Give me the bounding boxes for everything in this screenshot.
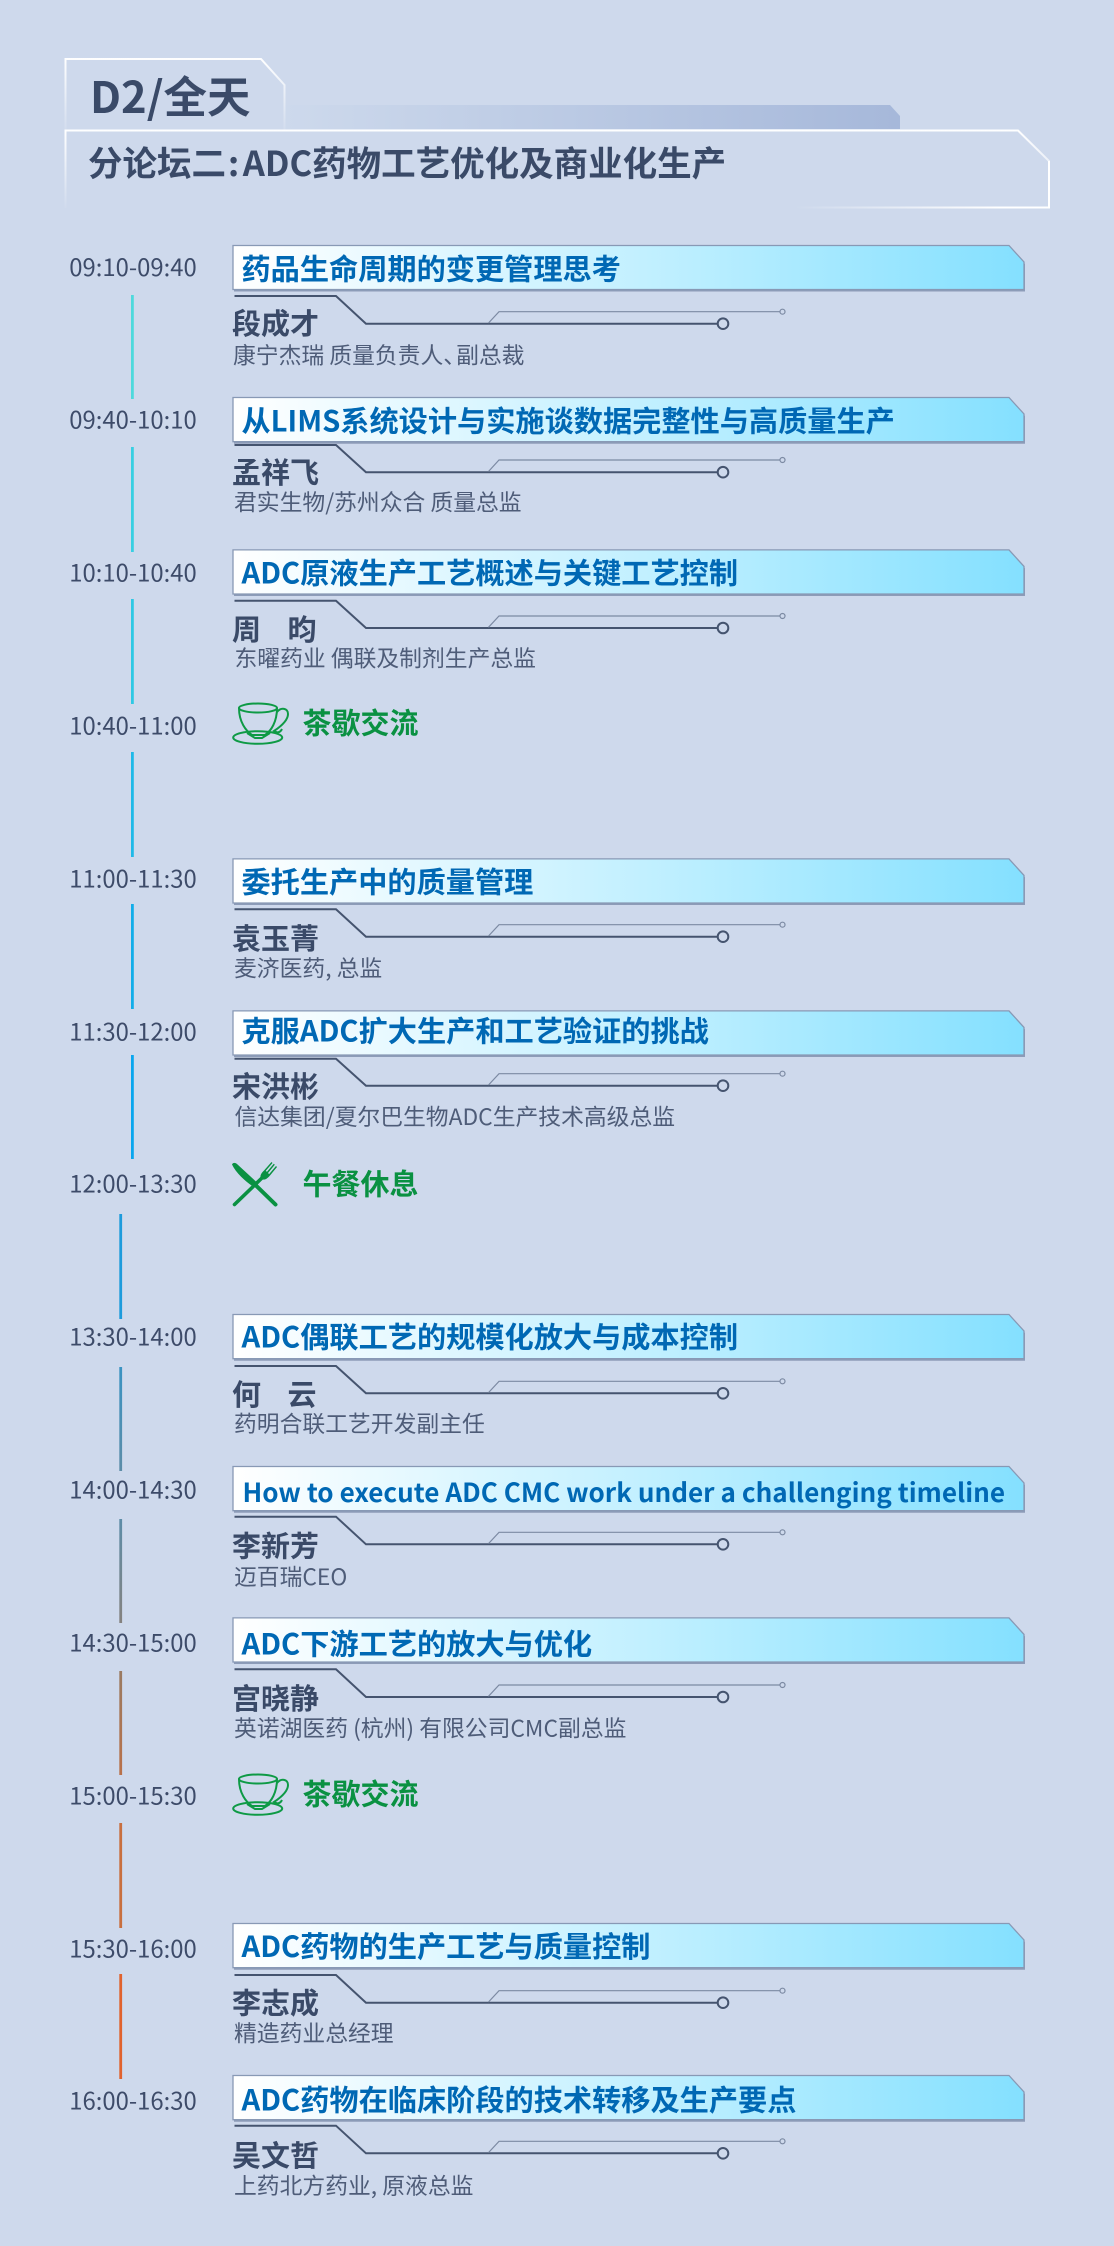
session 1: 药品生命周期的变更管理思考 <box>242 246 621 288</box>
header: gradient strip <box>285 105 900 129</box>
session 5: 宋洪彬 <box>232 1064 319 1106</box>
tea break 2: 15:00-15:30 <box>69 1776 197 1811</box>
session 9 <box>69 1924 1025 2049</box>
session 1 <box>69 246 1025 370</box>
session 7: 李新芳 <box>232 1524 319 1566</box>
session 5 <box>69 1009 1025 1132</box>
session 6: 药明合联工艺开发副主任 <box>234 1406 485 1439</box>
tea break 1: 10:40-11:00 <box>69 707 197 742</box>
session 10: 16:00-16:30 <box>69 2082 197 2117</box>
session 2: 孟祥飞 <box>232 450 319 492</box>
session 1: 段成才 <box>232 301 319 343</box>
icon: tea cup <box>233 704 288 744</box>
header: day tab <box>66 59 284 130</box>
session 7: How to execute ADC CMC work under a challenging timeline <box>242 1472 1005 1510</box>
timeline segments <box>119 295 134 2079</box>
session 10: 吴文哲 <box>232 2133 319 2175</box>
header: forum panel <box>66 130 1049 208</box>
session 10: 上药北方药业, 原液总监 <box>234 2168 473 2201</box>
tea break 1: 茶歇交流 <box>302 700 419 742</box>
tea break 2: 茶歇交流 <box>302 1771 419 1813</box>
icon: knife and fork <box>232 1162 277 1204</box>
session 9: 李志成 <box>232 1981 319 2023</box>
session 4 <box>69 859 1025 984</box>
session 8: 英诺湖医药 (杭州) 有限公司CMC副总监 <box>234 1711 626 1744</box>
session 2: 09:40-10:10 <box>69 401 197 436</box>
session 3: ADC原液生产工艺概述与关键工艺控制 <box>240 551 738 593</box>
session 7: 迈百瑞CEO <box>234 1559 347 1592</box>
session 4: 11:00-11:30 <box>69 860 197 895</box>
session 4: 委托生产中的质量管理 <box>242 860 533 902</box>
session 5: 11:30-12:00 <box>69 1013 197 1048</box>
session 6: 云 <box>288 1372 317 1414</box>
session 3: 东曜药业 偶联及制剂生产总监 <box>234 640 536 673</box>
session 6: ADC偶联工艺的规模化放大与成本控制 <box>240 1315 738 1357</box>
session 10: ADC药物在临床阶段的技术转移及生产要点 <box>240 2077 796 2119</box>
session 4: 袁玉菁 <box>232 916 319 958</box>
icon: tea cup <box>233 1774 288 1815</box>
session 3: 昀 <box>288 607 317 649</box>
session 3: 周 <box>232 607 261 649</box>
session 7: 14:00-14:30 <box>69 1471 197 1506</box>
session 9: ADC药物的生产工艺与质量控制 <box>240 1924 650 1966</box>
day label: D2/全天 <box>90 63 251 126</box>
tea break 1 <box>69 700 419 744</box>
session 10 <box>69 2076 1025 2201</box>
session 2: 君实生物/苏州众合 质量总监 <box>234 484 522 517</box>
session 4: 麦济医药, 总监 <box>234 951 382 984</box>
session 6: 13:30-14:00 <box>69 1317 197 1352</box>
session 8: ADC下游工艺的放大与优化 <box>240 1621 592 1663</box>
session 2 <box>69 398 1025 517</box>
session 6 <box>69 1314 1025 1439</box>
session 8: 宫晓静 <box>232 1676 319 1718</box>
session 2: 从LIMS系统设计与实施谈数据完整性与高质量生产 <box>242 399 895 441</box>
lunch break: 12:00-13:30 <box>69 1165 197 1200</box>
session 1: 09:10-09:40 <box>69 248 197 283</box>
lunch break <box>69 1161 419 1204</box>
session 3 <box>69 550 1025 673</box>
session 9: 精造药业总经理 <box>234 2016 394 2049</box>
session 3: 10:10-10:40 <box>69 554 197 589</box>
session 7 <box>69 1466 1025 1592</box>
forum title: 分论坛二:ADC药物工艺优化及商业化生产 <box>88 136 726 186</box>
session 5: 克服ADC扩大生产和工艺验证的挑战 <box>242 1009 709 1051</box>
session 5: 信达集团/夏尔巴生物ADC生产技术高级总监 <box>234 1099 675 1132</box>
tea break 2 <box>69 1771 419 1815</box>
session 8: 14:30-15:00 <box>69 1623 197 1658</box>
session 9: 15:30-16:00 <box>69 1930 197 1965</box>
session 6: 何 <box>232 1372 261 1414</box>
session 1: 康宁杰瑞 质量负责人、副总裁 <box>233 337 524 370</box>
session 8 <box>69 1618 1025 1744</box>
lunch break: 午餐休息 <box>302 1161 419 1203</box>
